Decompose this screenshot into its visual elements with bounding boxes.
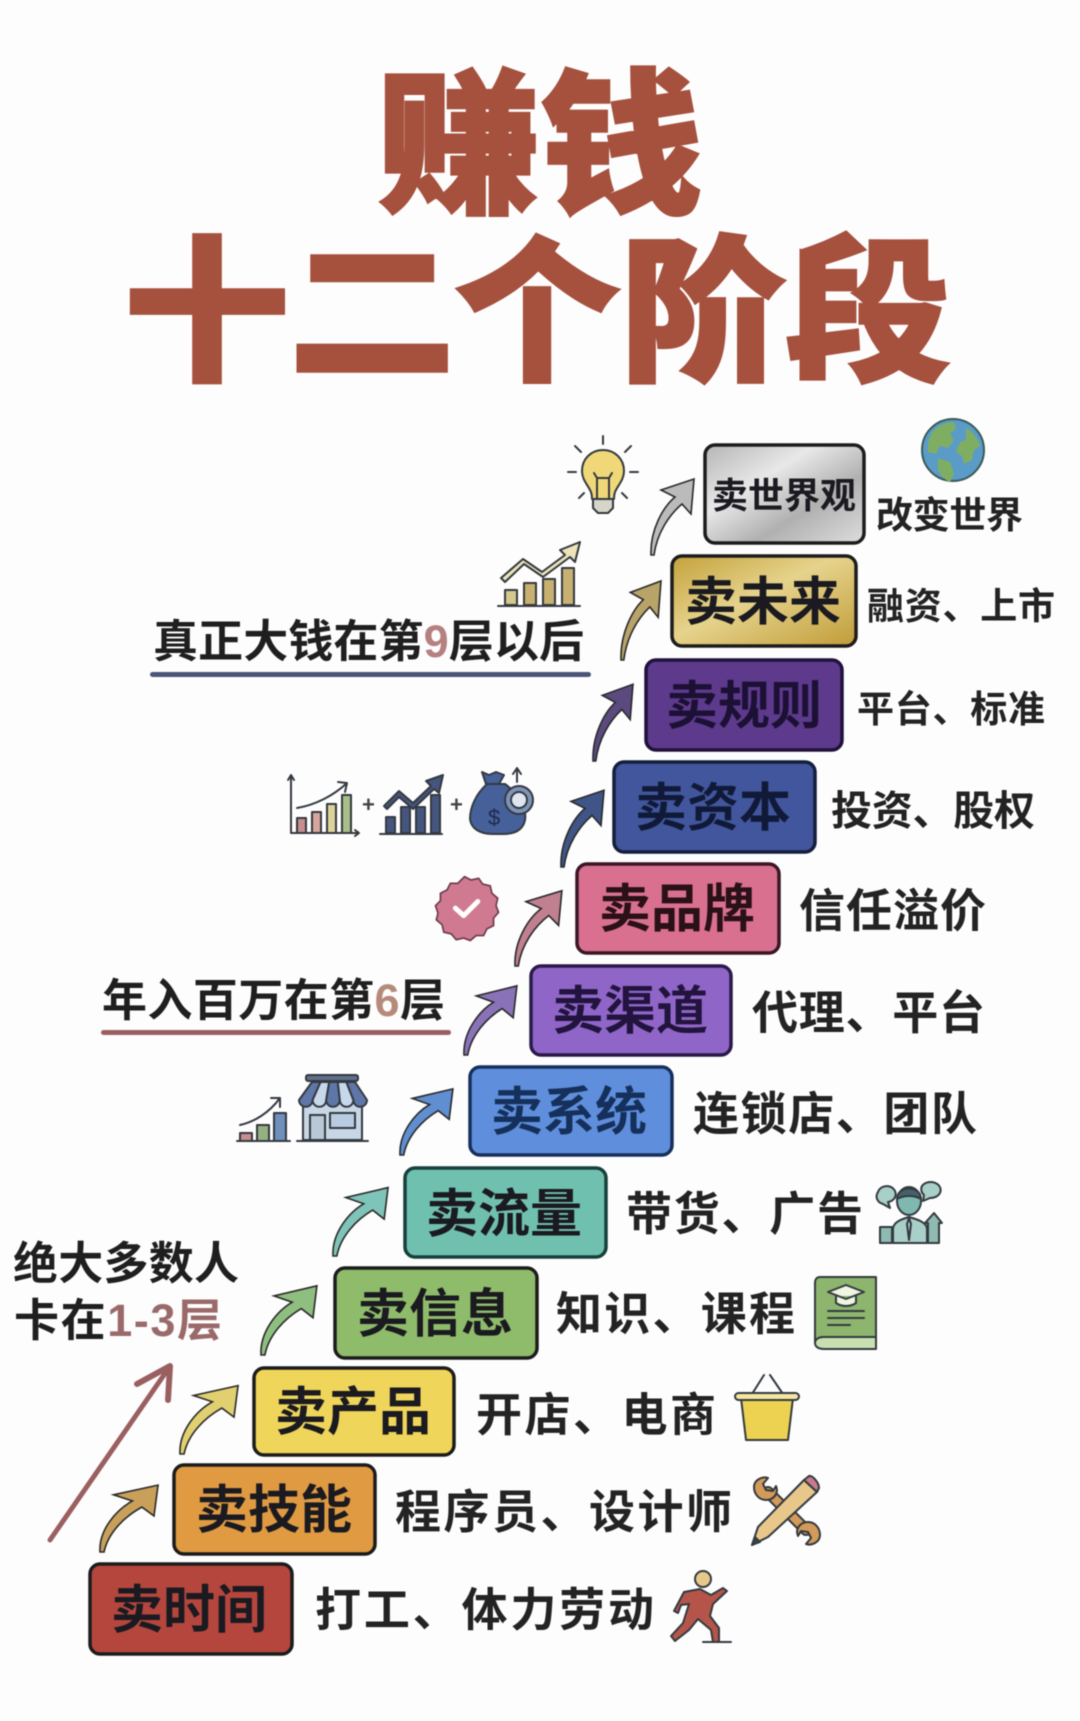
description 8: 信任溢价: [799, 885, 986, 937]
icon: formula of charts and money bag: [288, 768, 533, 836]
staircase: twelve stages: [90, 445, 864, 1654]
icon: light bulb: [568, 436, 638, 513]
stage 8 卖品牌: 卖品牌: [599, 881, 755, 939]
callout: million income at level 6: 年入百万在第6层: [102, 975, 445, 1026]
icon: gold growth chart: [498, 542, 580, 606]
callout: big money after level 9: 真正大钱在第9层以后: [153, 616, 584, 667]
title line 1: 赚钱: [378, 60, 702, 234]
stage 12 卖世界观: [705, 445, 864, 543]
arrow 3: [261, 1286, 317, 1355]
arrow 8: [561, 790, 604, 867]
icon: book with graduation cap: [815, 1277, 876, 1349]
plus sign: +: [362, 792, 375, 817]
icon: running worker: [671, 1571, 731, 1642]
stage 11 卖未来: 卖未来: [685, 574, 841, 632]
description 4: 知识、课程: [556, 1288, 795, 1340]
arrow 4: [333, 1188, 388, 1256]
stage 9 卖资本: [614, 762, 815, 852]
stage 10 卖规则: 卖规则: [666, 678, 822, 736]
curved arrows between stages: [100, 479, 694, 1552]
icon: wrench and pencil: [752, 1476, 820, 1545]
description 12: 改变世界: [876, 495, 1023, 536]
stage 4 卖信息: 卖信息: [357, 1286, 513, 1344]
stage 10 卖规则: [646, 660, 842, 750]
arrow 10: [621, 581, 661, 660]
icon: small chart with arrow: [237, 1098, 290, 1141]
stage 3 卖产品: 卖产品: [275, 1384, 431, 1442]
stage 5 卖流量: 卖流量: [426, 1186, 582, 1244]
icon: money bag: [470, 768, 533, 834]
description 11: 融资、上市: [867, 586, 1055, 627]
icon: check badge: [435, 877, 499, 941]
arrow 1: [100, 1485, 158, 1552]
description 5: 带货、广告: [626, 1188, 863, 1240]
description 9: 投资、股权: [831, 788, 1035, 834]
arrow 11: [651, 479, 694, 555]
description 7: 代理、平台: [752, 987, 985, 1039]
icon: globe: [922, 419, 984, 482]
arrow 6: [464, 986, 517, 1055]
stage 8 卖品牌: [577, 864, 779, 953]
description 6: 连锁店、团队: [693, 1088, 977, 1140]
callout: most people stuck at levels 1-3: [13, 1238, 239, 1346]
stage 3 卖产品: [254, 1368, 454, 1455]
icon: money bag: $: [488, 805, 500, 830]
description 1: 打工、体力劳动: [315, 1584, 654, 1636]
callout: most people stuck at levels 1-3: 绝大多数人: [13, 1238, 239, 1289]
description 2: 程序员、设计师: [395, 1486, 732, 1538]
description 3: 开店、电商: [476, 1389, 716, 1441]
stage 6 卖系统: 卖系统: [491, 1084, 647, 1142]
icon: navy growth chart: [380, 775, 443, 834]
icon: storefront: [297, 1075, 368, 1141]
stage 2 卖技能: 卖技能: [196, 1482, 352, 1540]
pencil: [752, 1476, 819, 1545]
stage 9 卖资本: 卖资本: [635, 780, 791, 838]
plus sign: +: [450, 792, 463, 817]
arrow 5: [400, 1089, 453, 1155]
long arrow to callout: [50, 1366, 170, 1540]
stage descriptions: [315, 495, 1055, 1636]
stage 2 卖技能: [174, 1465, 375, 1554]
icon: businessman with speech bubbles: [877, 1182, 942, 1243]
arrow 2: [180, 1386, 238, 1454]
stage 12 卖世界观: 卖世界观: [712, 475, 856, 516]
title: [124, 60, 951, 402]
wrench: [754, 1477, 820, 1545]
arrow 7: [515, 891, 562, 966]
stage 7 卖渠道: [531, 966, 731, 1055]
description 10: 平台、标准: [857, 689, 1045, 730]
icon: shopping basket: [735, 1375, 799, 1440]
stage 5 卖流量: [405, 1168, 606, 1257]
stage 1 卖时间: 卖时间: [111, 1582, 267, 1640]
icon: rising bar chart: [288, 775, 359, 836]
stage 4 卖信息: [335, 1268, 537, 1358]
callout: most people stuck at levels 1-3: 卡在1-3层: [14, 1295, 222, 1346]
stage 1 卖时间: [90, 1564, 292, 1654]
title line 2: 十二个阶段: [124, 227, 951, 402]
stage 6 卖系统: [470, 1067, 672, 1155]
stage 7 卖渠道: 卖渠道: [552, 983, 708, 1041]
arrow 9: [593, 684, 633, 761]
stage 11 卖未来: [672, 556, 856, 646]
